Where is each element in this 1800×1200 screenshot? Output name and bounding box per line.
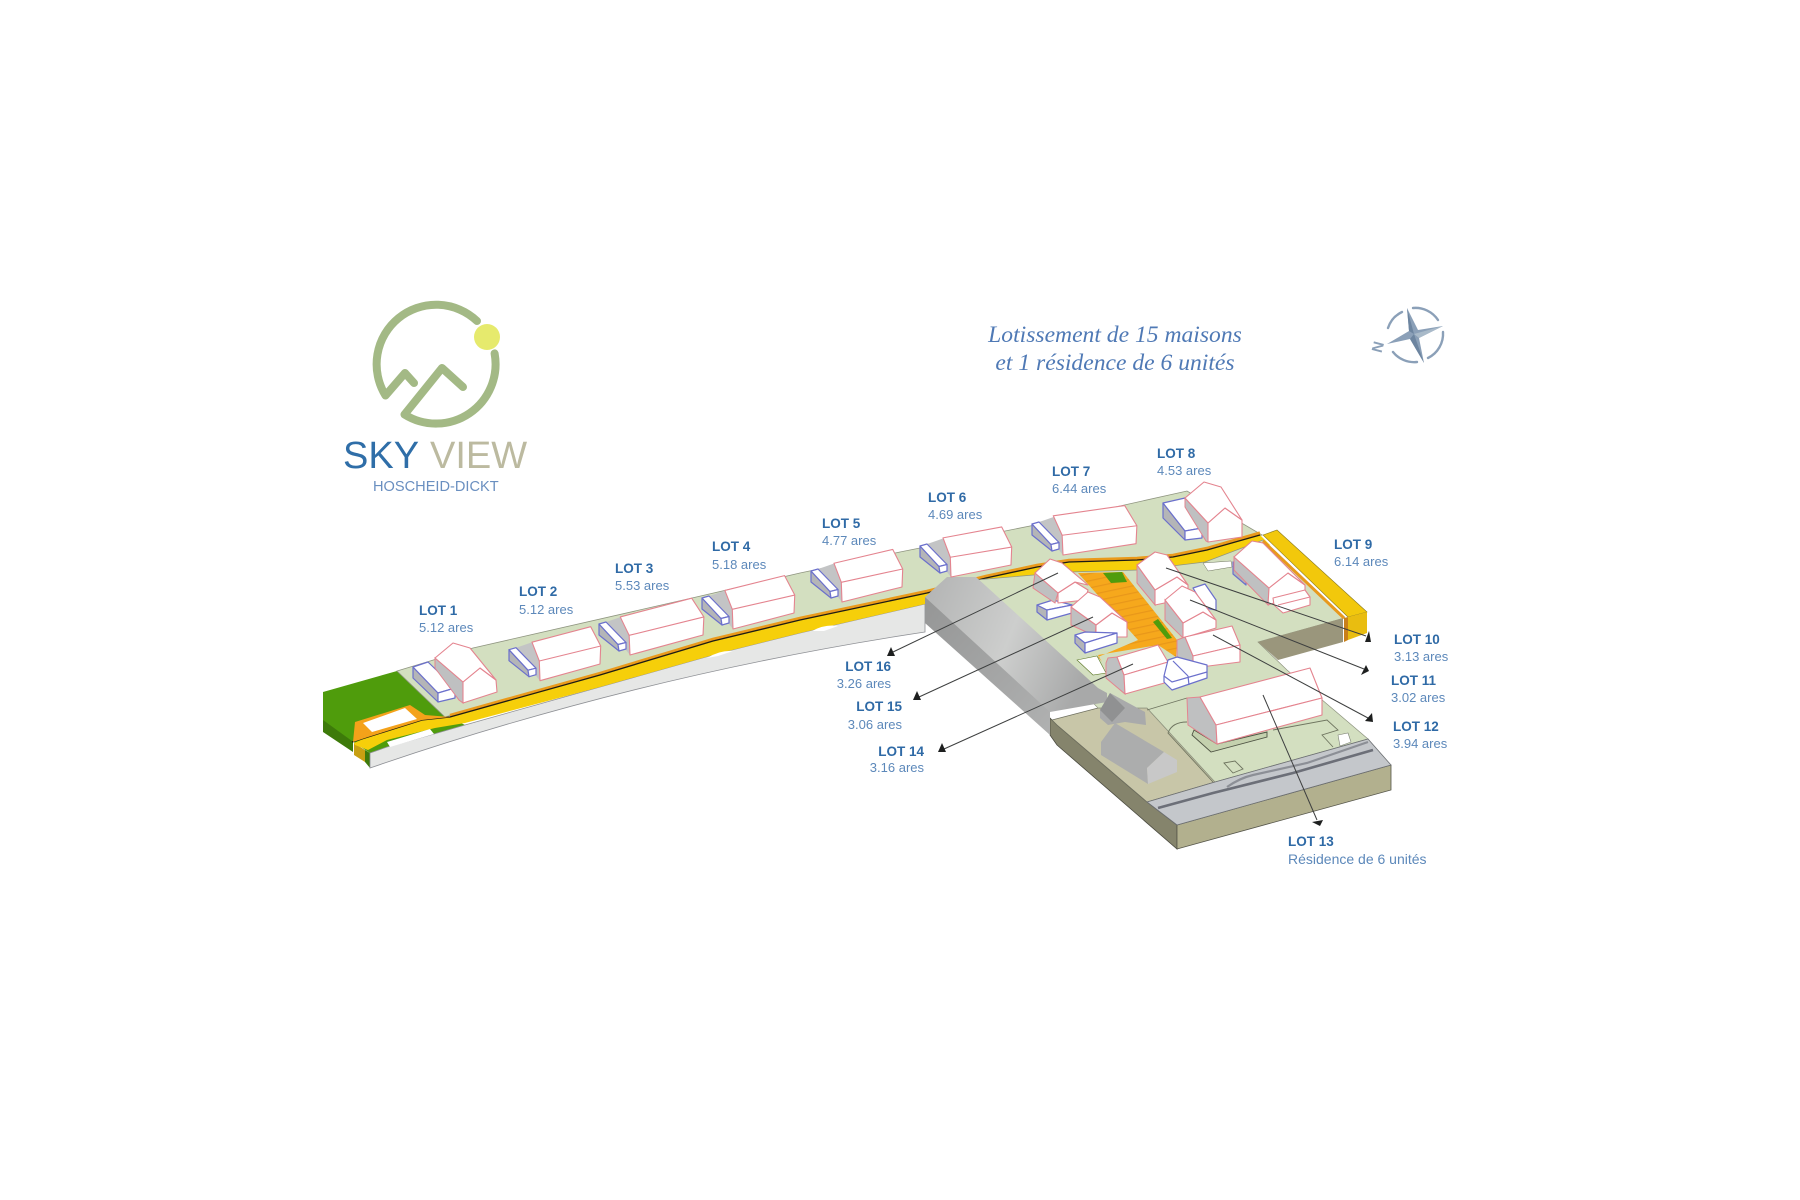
label: lot 11 bbox=[1391, 673, 1446, 705]
house: lot 1 bbox=[413, 643, 497, 703]
arrow: lot 15 bbox=[913, 617, 1093, 700]
arrow: lot 16 bbox=[887, 573, 1058, 656]
small grey building bbox=[1100, 693, 1146, 725]
label: lot 8: LOT 8 bbox=[1157, 446, 1196, 461]
label: lot 2: 5.12 ares bbox=[519, 602, 574, 617]
label: lot 4 bbox=[712, 539, 767, 572]
label: lot 11: 3.02 ares bbox=[1391, 690, 1446, 705]
leader arrows bbox=[887, 568, 1373, 826]
label: lot 1: LOT 1 bbox=[419, 603, 458, 618]
label: lot 11: LOT 11 bbox=[1391, 673, 1437, 688]
label: lot 3 bbox=[615, 561, 670, 593]
lot 13 forecourt bbox=[1192, 730, 1267, 752]
beige plot bbox=[1052, 708, 1215, 802]
logo ring and mountains bbox=[377, 305, 496, 424]
house: lot 5 bbox=[811, 548, 903, 604]
label: lot 5: 4.77 ares bbox=[822, 533, 877, 548]
long grey building bbox=[925, 577, 1107, 735]
site model bbox=[323, 482, 1391, 849]
label: lot 6: 4.69 ares bbox=[928, 507, 983, 522]
label: lot 14: LOT 14 bbox=[878, 744, 924, 759]
black road edge bbox=[352, 535, 1260, 742]
orange kerb bbox=[450, 533, 1260, 716]
small white hut bbox=[1338, 733, 1351, 746]
compass bbox=[1369, 308, 1443, 363]
green verge bbox=[323, 671, 465, 753]
title bbox=[987, 322, 1242, 376]
label: lot 5 bbox=[822, 516, 877, 548]
house: lot 14 bbox=[1106, 645, 1168, 694]
logo sun bbox=[474, 324, 500, 350]
label: lot 12: LOT 12 bbox=[1393, 719, 1439, 734]
label: lot 1 bbox=[419, 603, 474, 635]
base left face bbox=[1050, 718, 1177, 849]
house: lot 6 bbox=[920, 522, 1012, 582]
label: lot 4: LOT 4 bbox=[712, 539, 751, 554]
road bays bbox=[707, 651, 733, 658]
label: lot 15 bbox=[848, 699, 902, 732]
label: lot 4: 5.18 ares bbox=[712, 557, 767, 572]
sunken pit bbox=[1258, 618, 1343, 660]
label: lot 7: LOT 7 bbox=[1052, 464, 1090, 479]
house: lot 7 bbox=[1032, 500, 1137, 560]
yellow road bbox=[354, 535, 1270, 750]
label: lot 14: 3.16 ares bbox=[870, 760, 924, 775]
label: lot 12 bbox=[1393, 719, 1448, 751]
arrow: lot 10 bbox=[1166, 568, 1371, 642]
house: lot 9 bbox=[1233, 541, 1310, 613]
label: lot 16: LOT 16 bbox=[845, 659, 891, 674]
title: et 1 résidence de 6 unités bbox=[995, 350, 1235, 376]
logo wordmark: VIEW bbox=[430, 435, 527, 477]
label: lot 1: 5.12 ares bbox=[419, 620, 474, 635]
label: lot 14 bbox=[870, 744, 924, 775]
label: lot 2 bbox=[519, 584, 574, 617]
house: lot 2 bbox=[509, 627, 601, 681]
grey road side bbox=[370, 604, 925, 768]
dark side faces bbox=[323, 692, 353, 752]
label: lot 10: LOT 10 bbox=[1394, 632, 1440, 647]
label: lot 15: 3.06 ares bbox=[848, 717, 902, 732]
base right face bbox=[1177, 765, 1391, 849]
label: lot 6: LOT 6 bbox=[928, 490, 967, 505]
title: Lotissement de 15 maisons bbox=[987, 322, 1242, 348]
house: lot 15 bbox=[1071, 592, 1127, 653]
label: lot 13 bbox=[1288, 834, 1427, 867]
label: lot 12: 3.94 ares bbox=[1393, 736, 1448, 751]
label: lot 10: 3.13 ares bbox=[1394, 649, 1449, 664]
label: lot 9 bbox=[1334, 537, 1389, 569]
arrow: lot 13 bbox=[1263, 695, 1323, 826]
site outlines bbox=[1147, 698, 1338, 782]
label: lot 16: 3.26 ares bbox=[837, 676, 891, 691]
label: lot 16 bbox=[837, 659, 891, 691]
arrow: lot 11 bbox=[1190, 600, 1369, 675]
house: lot 12 bbox=[1164, 626, 1240, 690]
labels bbox=[419, 446, 1449, 867]
north land strip bbox=[397, 491, 1262, 717]
label: lot 2: LOT 2 bbox=[519, 584, 557, 599]
south land bbox=[975, 540, 1368, 782]
label: lot 9: 6.14 ares bbox=[1334, 554, 1389, 569]
east road arm bbox=[1263, 530, 1367, 617]
logo wordmark: SKY bbox=[343, 435, 418, 477]
label: lot 10 bbox=[1394, 632, 1449, 664]
south plot bbox=[975, 530, 1391, 849]
grey house bbox=[1101, 723, 1177, 784]
arrow: lot 12 bbox=[1213, 635, 1373, 722]
label: lot 7: 6.44 ares bbox=[1052, 481, 1107, 496]
logo location: HOSCHEID-DICKT bbox=[373, 479, 499, 495]
arrow: lot 14 bbox=[938, 664, 1133, 752]
house: lot 3 bbox=[599, 598, 704, 655]
label: lot 3: LOT 3 bbox=[615, 561, 654, 576]
house: lot 16 bbox=[1033, 559, 1088, 620]
logo: Sky View bbox=[343, 305, 527, 495]
house: lot 10 bbox=[1137, 552, 1188, 605]
house: lot 11 bbox=[1165, 584, 1216, 638]
label: lot 8 bbox=[1157, 446, 1212, 478]
green pads bbox=[1103, 572, 1127, 583]
label: lot 9: LOT 9 bbox=[1334, 537, 1372, 552]
label: lot 13: LOT 13 bbox=[1288, 834, 1334, 849]
label: lot 15: LOT 15 bbox=[856, 699, 902, 714]
white parking bbox=[1077, 656, 1106, 675]
label: lot 3: 5.53 ares bbox=[615, 578, 670, 593]
house: lot 4 bbox=[702, 575, 795, 630]
grey neighbouring buildings bbox=[925, 577, 1177, 784]
west road strip bbox=[323, 491, 1270, 768]
label: lot 8: 4.53 ares bbox=[1157, 463, 1212, 478]
south road bbox=[1147, 739, 1391, 825]
label: lot 13: Résidence de 6 unités bbox=[1288, 851, 1427, 867]
house: lot 13 residence bbox=[1187, 668, 1322, 744]
compass: N bbox=[1369, 340, 1388, 355]
plaza bbox=[1078, 572, 1177, 662]
west parking forecourt bbox=[353, 705, 450, 742]
label: lot 6 bbox=[928, 490, 983, 522]
house: lot 8 bbox=[1163, 482, 1242, 542]
label: lot 7 bbox=[1052, 464, 1107, 496]
label: lot 5: LOT 5 bbox=[822, 516, 861, 531]
